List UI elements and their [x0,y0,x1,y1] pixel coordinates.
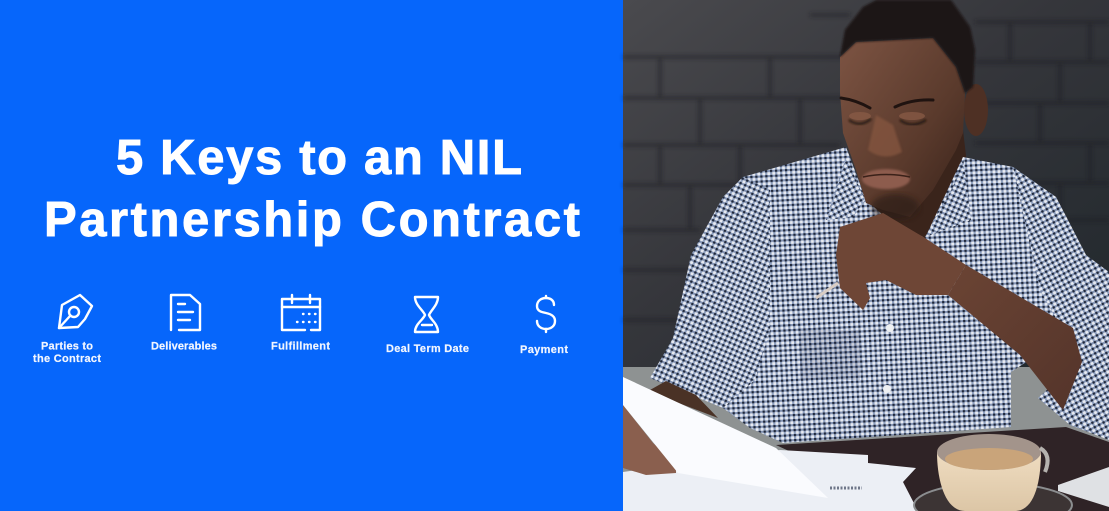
brick wall background [623,0,1109,367]
key: parties to the contract [33,295,101,365]
label: parties to the contract: the Contract [33,353,101,365]
lips [862,169,910,189]
shirt buttons [883,324,894,393]
saucer [914,483,1072,511]
key: deliverables [151,295,217,352]
held paper [623,377,828,498]
eyelids [849,112,871,120]
label: parties to the contract: Parties to [41,340,93,352]
laptop [1058,467,1109,507]
title: 5 Keys to an NIL [116,131,522,185]
shirt body [700,147,1086,443]
forearm and hand [836,213,1082,410]
ear [964,84,988,136]
eyebrows [841,98,933,108]
label: deliverables: Deliverables [151,340,217,352]
right sleeve [1013,167,1109,440]
left hand [623,405,676,475]
paper print [830,486,862,490]
panel: blue title panel [0,0,623,511]
icon: dollar sign [537,296,555,332]
title: Partnership Contract [44,193,580,247]
left sleeve [650,177,770,408]
key: payment [520,296,568,356]
key: deal term date [386,297,469,355]
icon: calendar [282,295,320,330]
table [776,427,1109,511]
icon: pen nib [59,295,92,328]
left collar [826,157,865,220]
label: fulfillment: Fulfillment [271,340,330,352]
photo: man reviewing a contract [623,0,1109,511]
pen [816,283,838,298]
neck [866,130,970,240]
nose [868,115,902,157]
hair [840,0,975,93]
eyes [849,119,926,124]
label: parties to the contract [33,340,101,365]
shirt shadow [800,330,860,380]
left forearm [650,381,718,418]
papers on table [623,450,918,511]
background wall base [623,366,1109,511]
label: payment: Payment [520,344,568,356]
label: deal term date: Deal Term Date [386,343,469,355]
right collar [925,157,971,237]
beard shadow [871,194,919,220]
icon: document [171,295,200,330]
face [840,38,965,220]
coffee cup [937,434,1048,511]
icon: hourglass [415,297,438,332]
title [44,131,580,247]
key: fulfillment [271,295,330,352]
